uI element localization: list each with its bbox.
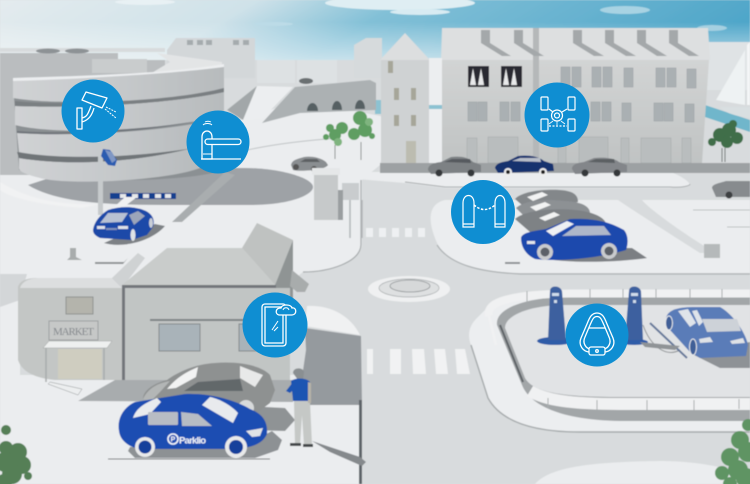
charging stations (537, 286, 687, 358)
crosswalk upper (366, 228, 425, 237)
icon: charging triangle (566, 304, 628, 366)
Parklio logo (168, 434, 206, 446)
street sidewalk (345, 172, 690, 188)
far ramp with arches (227, 78, 376, 123)
garage entry with barrier (98, 149, 235, 222)
person with phone (286, 368, 313, 447)
tree bottom-left (0, 425, 32, 484)
blue car in parking bay (521, 219, 647, 262)
market building (18, 223, 293, 380)
roundabout (368, 276, 450, 302)
icon: smart barrier (186, 110, 250, 174)
street parked cars (428, 156, 750, 198)
main building with dormers (441, 28, 710, 163)
upper parking island (431, 200, 750, 273)
lower crosswalk (367, 349, 470, 374)
Parklio blue car (108, 394, 282, 459)
Parklio logo: P (171, 436, 176, 444)
spiral parking garage (13, 64, 224, 182)
distant buildings (167, 38, 750, 90)
lower-left sidewalk (0, 300, 362, 484)
utility box (704, 244, 720, 258)
charging island (469, 289, 750, 432)
garage ground shadow (28, 168, 313, 205)
trees (323, 111, 743, 162)
left gabled house (380, 33, 442, 163)
tree bottom-right (715, 419, 750, 484)
water (690, 100, 750, 132)
icon: gate with chain (451, 180, 515, 244)
street lamp post (359, 400, 362, 484)
sky (0, 0, 750, 90)
gray road left of market (0, 274, 27, 307)
market sign and awning (43, 321, 112, 395)
blue car at garage (93, 207, 165, 245)
kiosk and sign (312, 168, 362, 238)
sailboat (716, 42, 750, 118)
row of parked grey cars (515, 190, 606, 232)
small car at the distance (291, 157, 328, 172)
icon: phone with cloud (242, 292, 308, 358)
lower-right plaza (535, 461, 750, 484)
building shadow on ground (78, 380, 293, 402)
icon: security camera (62, 80, 124, 142)
garage rear wall (0, 48, 222, 175)
roof fixtures (67, 223, 221, 264)
grey car behind customer (143, 363, 295, 431)
market sign and awning: MARKET (53, 326, 94, 338)
Parklio logo: Parklio (179, 436, 206, 446)
plaza around garage (0, 100, 390, 290)
charging electric car (666, 307, 750, 368)
icon: connected devices (524, 82, 590, 148)
